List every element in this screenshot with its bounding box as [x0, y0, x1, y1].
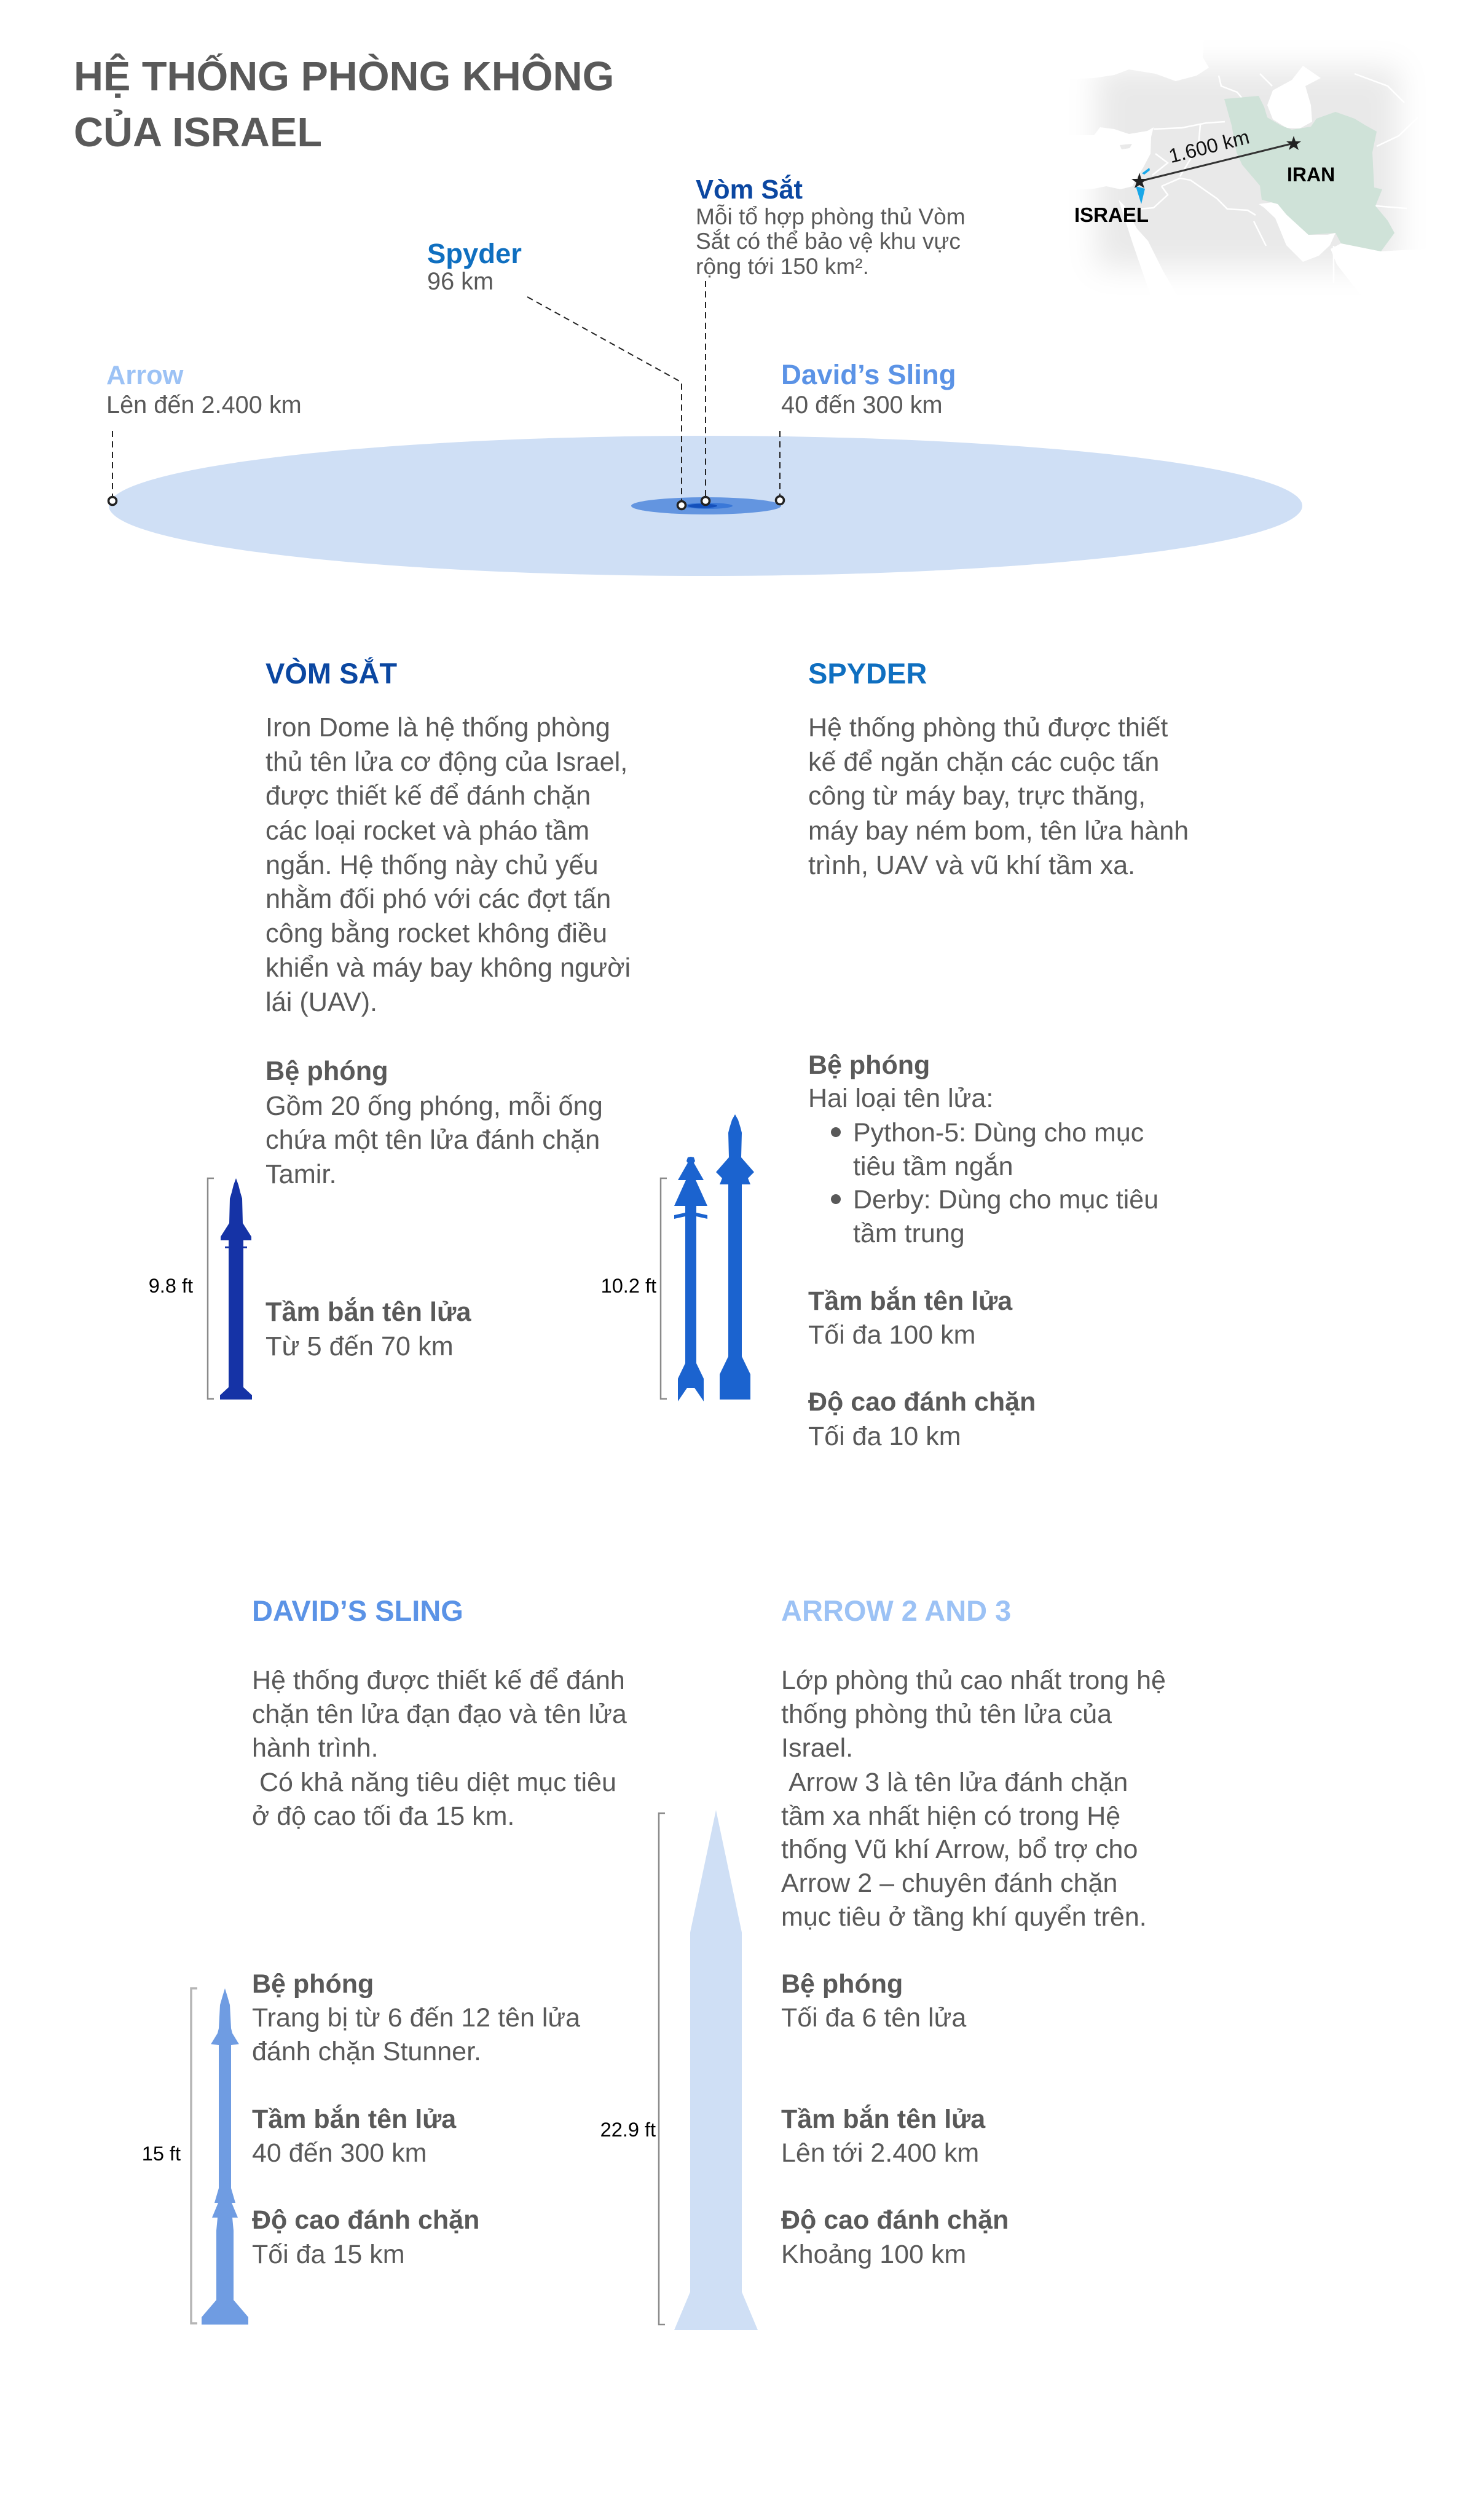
title: HỆ THỐNG PHÒNG KHÔNG	[74, 53, 614, 100]
launcher heading: Bệ phóng	[808, 1050, 930, 1080]
range text: Tối đa 100 km	[808, 1320, 975, 1350]
map: Israel star	[1131, 173, 1147, 188]
bullet list: tầm trung	[853, 1219, 965, 1248]
launcher heading: Bệ phóng	[252, 1969, 374, 1999]
launcher heading: Bệ phóng	[266, 1057, 388, 1086]
heading: ARROW 2 AND 3	[781, 1594, 1011, 1627]
height label: 15 ft	[142, 2143, 181, 2165]
label: Vòm Sắt description: Sắt có thể bảo vệ khu vực	[696, 228, 961, 254]
description: Arrow 2 – chuyên đánh chặn	[781, 1868, 1117, 1898]
label: Spyder range: 96 km	[427, 268, 494, 295]
label: David's Sling: David’s Sling	[781, 359, 956, 390]
launcher text: Tối đa 6 tên lửa	[781, 2003, 966, 2033]
label: David's Sling range: 40 đến 300 km	[781, 392, 943, 419]
height bracket	[659, 1813, 665, 2325]
panel: Vòm Sắt	[149, 657, 631, 1400]
rocket: Arrow	[674, 1810, 758, 2330]
panel: Spyder	[601, 657, 1189, 1451]
description: lái (UAV).	[266, 988, 377, 1017]
marker: Arrow	[108, 497, 117, 505]
range text: Từ 5 đến 70 km	[266, 1332, 454, 1361]
description: chặn tên lửa đạn đạo và tên lửa	[252, 1699, 627, 1729]
description: Arrow 3 là tên lửa đánh chặn	[789, 1768, 1128, 1797]
description: máy bay ném bom, tên lửa hành	[808, 816, 1189, 846]
description: thủ tên lửa cơ động của Israel,	[266, 747, 627, 777]
description: các loại rocket và pháo tầm	[266, 816, 589, 846]
bullet list: Python-5: Dùng cho mục	[853, 1118, 1144, 1148]
description: Hệ thống phòng thủ được thiết	[808, 713, 1168, 742]
panel: David's Sling	[142, 1594, 627, 2325]
launcher text: Trang bị từ 6 đến 12 tên lửa	[252, 2003, 580, 2033]
description: trình, UAV và vũ khí tầm xa.	[808, 851, 1135, 880]
title: CỦA ISRAEL	[74, 109, 322, 156]
description: công từ máy bay, trực thăng,	[808, 781, 1146, 811]
range heading: Tầm bắn tên lửa	[266, 1297, 471, 1327]
bullet list: Derby: Dùng cho mục tiêu	[853, 1185, 1158, 1215]
label: Vòm Sắt description: rộng tới 150 km².	[696, 253, 869, 279]
bullet list: tiêu tầm ngắn	[853, 1152, 1013, 1181]
description: thống phòng thủ tên lửa của	[781, 1699, 1112, 1729]
description: khiển và máy bay không người	[266, 953, 631, 983]
map: Israel	[1136, 168, 1150, 204]
height label: 10.2 ft	[601, 1275, 656, 1297]
description: Iron Dome là hệ thống phòng	[266, 713, 610, 742]
map: distance from Israel to Iran	[1076, 63, 1402, 272]
description: mục tiêu ở tầng khí quyển trên.	[781, 1902, 1147, 1932]
altitude heading: Độ cao đánh chặn	[252, 2205, 479, 2235]
height bracket	[208, 1178, 214, 1399]
description: kế để ngăn chặn các cuộc tấn	[808, 747, 1159, 777]
altitude heading: Độ cao đánh chặn	[781, 2205, 1009, 2235]
range text: Lên tới 2.400 km	[781, 2138, 979, 2168]
description: ngắn. Hệ thống này chủ yếu	[266, 851, 599, 880]
description: ở độ cao tối đa 15 km.	[252, 1801, 514, 1831]
heading: VÒM SẮT	[266, 657, 397, 690]
leader: Spyder	[527, 297, 682, 505]
leader: Arrow	[112, 431, 113, 500]
description: Lớp phòng thủ cao nhất trong hệ	[781, 1666, 1166, 1695]
ellipse: David's Sling range	[631, 497, 781, 514]
height label: 9.8 ft	[149, 1275, 193, 1297]
panel: Arrow 2 and 3	[600, 1594, 1166, 2330]
ellipse: Arrow range	[109, 436, 1302, 576]
map label: Israel: ISRAEL	[1074, 203, 1149, 226]
leader: Vòm Sắt	[705, 281, 706, 501]
marker: Spyder	[677, 502, 686, 509]
range heading: Tầm bắn tên lửa	[808, 1286, 1013, 1316]
label: Vòm Sắt: Vòm Sắt	[696, 174, 803, 205]
label: Spyder: Spyder	[427, 238, 522, 269]
bullet list	[831, 1118, 1158, 1248]
height label: 22.9 ft	[600, 2119, 656, 2141]
launcher text: chứa một tên lửa đánh chặn	[266, 1125, 600, 1155]
rocket: Derby	[716, 1114, 754, 1400]
height bracket	[661, 1178, 667, 1399]
heading: SPYDER	[808, 657, 927, 690]
launcher text: Tamir.	[266, 1160, 336, 1189]
altitude heading: Độ cao đánh chặn	[808, 1387, 1036, 1417]
ellipse: Spyder range	[683, 503, 733, 509]
marker: David's Sling	[776, 497, 784, 504]
description: Hệ thống được thiết kế để đánh	[252, 1666, 625, 1695]
heading: DAVID’S SLING	[252, 1594, 463, 1627]
label: Arrow: Arrow	[106, 361, 184, 390]
leader: David's Sling	[779, 431, 781, 500]
map label: distance: 1.600 km	[1166, 125, 1252, 167]
marker: Vòm Sắt	[702, 497, 709, 505]
description: Có khả năng tiêu diệt mục tiêu	[259, 1768, 616, 1797]
map: Iran	[1224, 96, 1394, 251]
range heading: Tầm bắn tên lửa	[252, 2104, 457, 2134]
launcher text: đánh chặn Stunner.	[252, 2037, 481, 2066]
range text: 40 đến 300 km	[252, 2138, 427, 2168]
map label: Iran: IRAN	[1287, 163, 1335, 186]
altitude text: Tối đa 15 km	[252, 2240, 405, 2269]
map: distance line	[1139, 143, 1294, 181]
altitude text: Khoảng 100 km	[781, 2240, 966, 2269]
rocket: Python-5	[674, 1157, 707, 1401]
label: Arrow range: Lên đến 2.400 km	[106, 392, 302, 419]
launcher heading: Bệ phóng	[781, 1969, 903, 1999]
range diagram	[106, 174, 1302, 576]
description: thống Vũ khí Arrow, bổ trợ cho	[781, 1835, 1138, 1864]
rocket: Stunner	[202, 1988, 248, 2325]
label: Vòm Sắt description: Mỗi tổ hợp phòng thủ Vòm	[696, 203, 966, 229]
range heading: Tầm bắn tên lửa	[781, 2104, 986, 2134]
rocket: Tamir	[220, 1178, 252, 1400]
description: nhằm đối phó với các đợt tấn	[266, 884, 611, 914]
description: được thiết kế để đánh chặn	[266, 781, 591, 811]
map: Iran star	[1286, 136, 1301, 150]
height bracket	[191, 1988, 197, 2323]
ellipse: Iron Dome range	[688, 504, 717, 508]
altitude text: Tối đa 10 km	[808, 1422, 961, 1451]
launcher text: Gồm 20 ống phóng, mỗi ống	[266, 1092, 603, 1121]
description: tầm xa nhất hiện có trong Hệ	[781, 1801, 1120, 1831]
launcher intro: Hai loại tên lửa:	[808, 1084, 993, 1113]
description: Israel.	[781, 1733, 853, 1763]
description: hành trình.	[252, 1733, 379, 1763]
description: công bằng rocket không điều	[266, 919, 607, 948]
